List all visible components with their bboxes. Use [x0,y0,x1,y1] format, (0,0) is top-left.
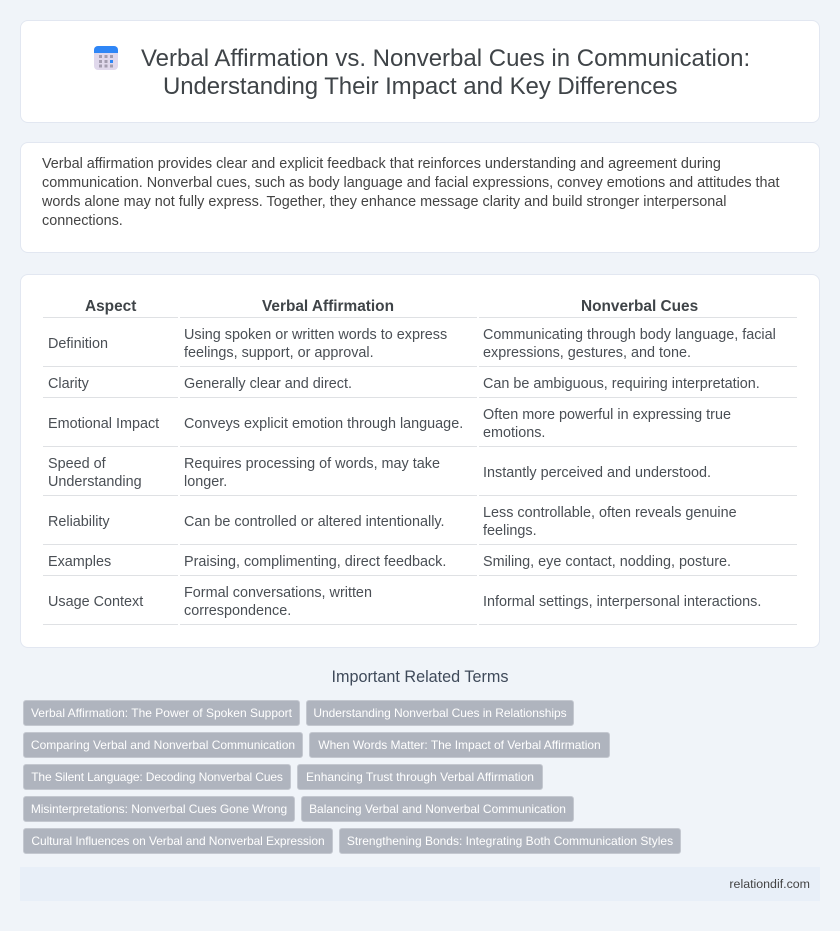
row: examples: Smiling, eye contact, nodding, posture. [483,554,731,570]
row: reliability: Reliability [48,514,110,530]
related term tags: Balancing Verbal and Nonverbal Communication [309,802,566,816]
row: clarity: Generally clear and direct. [184,376,352,392]
row: speed of understanding: Understanding [48,474,142,490]
row: emotional impact [48,407,731,441]
related term tags: Understanding Nonverbal Cues in Relationships [313,706,567,720]
row: usage context: correspondence. [184,603,291,619]
row: speed of understanding: longer. [184,474,227,490]
row: usage context: Formal conversations, written [184,585,372,601]
related term tags: Enhancing Trust through Verbal Affirmation [306,770,534,784]
row: reliability: feelings. [483,523,537,539]
related term tags: The Silent Language: Decoding Nonverbal Cues [31,770,283,784]
header panel [20,20,820,123]
intro text: communication. Nonverbal cues, such as body language and facial expressions, convey emotions and attitudes that [42,175,780,191]
row: usage context: Informal settings, interpersonal interactions. [483,594,761,610]
row: speed of understanding [48,456,711,490]
table header: Aspect [85,298,136,315]
row: reliability [48,505,737,539]
related term tags: Misinterpretations: Nonverbal Cues Gone Wrong [31,802,287,816]
row: examples: Examples [48,554,111,570]
table [43,298,797,625]
related terms heading: Important Related Terms [332,668,508,686]
table header: Nonverbal Cues [581,298,698,315]
row: clarity: Can be ambiguous, requiring interpretation. [483,376,760,392]
row: clarity: Clarity [48,376,89,392]
row: speed of understanding: Instantly perceived and understood. [483,465,711,481]
table header: Verbal Affirmation [262,298,394,315]
row: reliability: Can be controlled or altered intentionally. [184,514,445,530]
row: definition: feelings, support, or approval. [184,345,374,361]
row: emotional impact: emotions. [483,425,545,441]
footer text: relationdif.com [729,877,810,891]
intro panel [20,142,820,253]
row: emotional impact: Conveys explicit emotion through language. [184,416,463,432]
row: definition [48,327,776,361]
row: examples [48,554,731,570]
comparison table panel [20,274,820,648]
related term tags: Verbal Affirmation: The Power of Spoken Support [31,706,292,720]
row: definition: Definition [48,336,108,352]
intro text: Verbal affirmation provides clear and explicit feedback that reinforces understanding and agreement during [42,156,721,172]
intro text: words alone may not fully express. Together, they enhance message clarity and build stronger interpersonal [42,194,726,210]
row: definition: Communicating through body language, facial [483,327,776,343]
intro text [42,156,780,229]
title: Verbal Affirmation vs. Nonverbal Cues in Communication: [141,45,750,72]
icon: calendar [94,46,118,70]
row: definition: Using spoken or written words to express [184,327,447,343]
row: definition: expressions, gestures, and tone. [483,345,691,361]
related term tags: Cultural Influences on Verbal and Nonverbal Expression [31,834,325,848]
row: usage context [48,585,761,619]
row: emotional impact: Often more powerful in expressing true [483,407,731,423]
related term tags: Strengthening Bonds: Integrating Both Communication Styles [347,834,673,848]
intro text: connections. [42,213,123,229]
row: speed of understanding: Requires processing of words, may take [184,456,440,472]
title line 2: Understanding Their Impact and Key Differences [163,73,677,100]
row: clarity [48,376,760,392]
related term tags: Comparing Verbal and Nonverbal Communication [31,738,295,752]
row: speed of understanding: Speed of [48,456,106,472]
row: emotional impact: Emotional Impact [48,416,159,432]
row: reliability: Less controllable, often reveals genuine [483,505,737,521]
row: usage context: Usage Context [48,594,143,610]
row: examples: Praising, complimenting, direct feedback. [184,554,446,570]
related term tags: When Words Matter: The Impact of Verbal Affirmation [318,738,601,752]
footer bar [20,867,820,901]
table header [85,298,698,315]
related term tags [23,700,681,854]
